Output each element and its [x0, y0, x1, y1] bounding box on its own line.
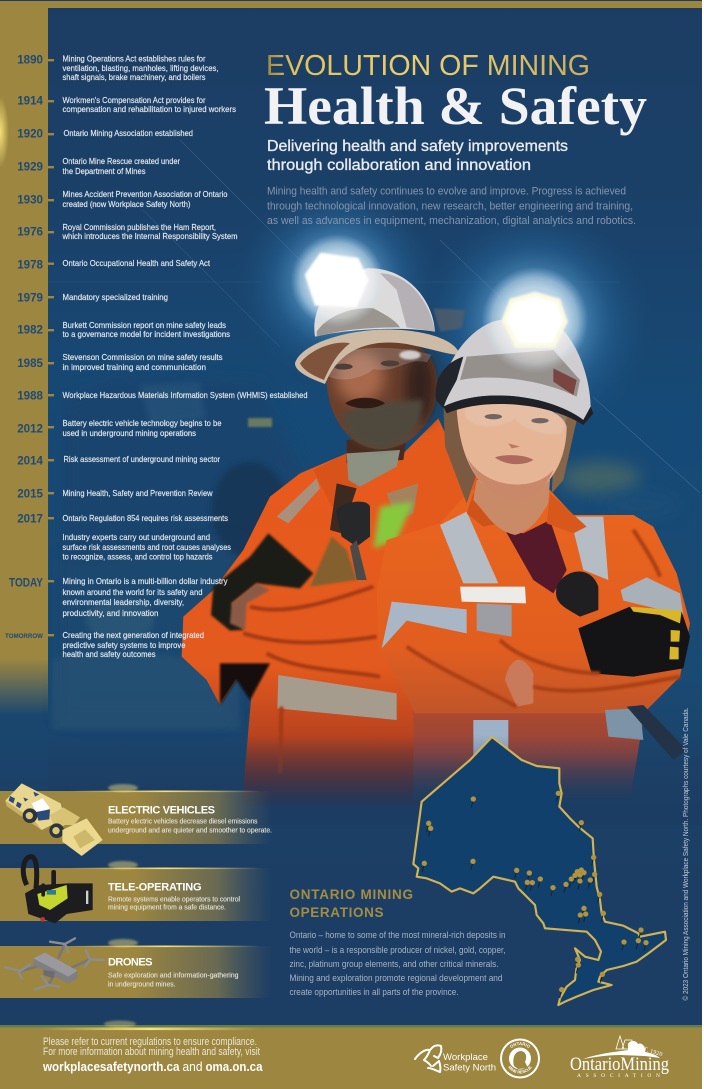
- 2017: surface risk assessments and root causes analyses: [62, 543, 231, 552]
- logo: Workplace Safety North: Safety North: [443, 1062, 496, 1074]
- Tomorrow: health and safety outcomes: [62, 650, 156, 659]
- logo: Workplace Safety North: Workplace: [443, 1052, 488, 1063]
- fade below the miners: [48, 735, 702, 825]
- logo: Ontario Mine Rescue: ONTARIO: [510, 1042, 530, 1048]
- text: Ontario mining operations: [290, 930, 506, 997]
- heading and description: TELE-OPERATING: [108, 882, 202, 894]
- Today: [9, 576, 228, 618]
- overline: Evolution of Mining: EVOLUTION OF MINING: [266, 50, 590, 82]
- Today: productivity, and innovation: [62, 609, 159, 618]
- footer note: [43, 1036, 260, 1058]
- footer links: workplacesafetynorth.ca: [42, 1060, 180, 1074]
- intro paragraph: as well as advances in equipment, mechanization, digital analytics and robotics.: [267, 215, 636, 227]
- 1988: [17, 390, 308, 402]
- title: [264, 50, 647, 136]
- heading and description: DRONES: [108, 956, 152, 968]
- woman's face: [457, 400, 567, 499]
- 1976: 1976: [17, 226, 44, 238]
- 1920: Ontario Mining Association established: [64, 129, 193, 138]
- footer links: and: [182, 1060, 202, 1074]
- 2017: Ontario Regulation 854 requires risk assessments: [62, 514, 228, 523]
- panel: drones: [0, 938, 272, 998]
- 1890: ventilation, blasting, manholes, lifting devices,: [62, 64, 218, 73]
- 1979: [17, 292, 168, 304]
- logo: Workplace Safety North: [415, 1045, 496, 1074]
- 1890: Mining Operations Act establishes rules for: [62, 54, 206, 64]
- intro paragraph: [267, 186, 636, 227]
- subtitle: [267, 138, 568, 174]
- 1979: 1979: [17, 292, 44, 304]
- 1978: Ontario Occupational Health and Safety Act: [62, 259, 211, 268]
- 1985: 1985: [17, 357, 44, 370]
- 1930: created (now Workplace Safety North): [62, 200, 191, 209]
- panel: electric vehicles: [0, 783, 272, 856]
- 2017: [17, 512, 231, 562]
- 1976: [17, 223, 238, 241]
- 1979: Mandatory specialized training: [62, 293, 168, 302]
- Tomorrow: Creating the next generation of integrated: [62, 631, 204, 640]
- heading and description: ELECTRIC VEHICLES: [108, 804, 215, 816]
- 2014: [17, 454, 220, 468]
- 1985: Stevenson Commission on mine safety results: [62, 353, 222, 362]
- lamp glow: [233, 177, 655, 442]
- photo credit: © 2023 Ontario Mining Association and Workplace Safety North. Photographs courtesy of Vale Canada.: [681, 708, 690, 1000]
- 1930: Mines Accident Prevention Association of Ontario: [62, 190, 228, 199]
- 1929: Ontario Mine Rescue created under: [62, 157, 180, 166]
- 2017: 2017: [17, 512, 43, 526]
- 2012: 2012: [17, 422, 43, 436]
- heading and description: underground and are quieter and smoother to operate.: [108, 826, 272, 834]
- footer: [0, 1019, 702, 1089]
- 2017: to recognize, assess, and control top hazards: [62, 552, 212, 562]
- man's head lamp: [291, 234, 384, 327]
- logo: Ontario Mining Association: OntarioMining: [570, 1054, 669, 1075]
- subtitle: through collaboration and innovation: [267, 157, 531, 174]
- 2015: 2015: [17, 488, 44, 500]
- 2014: Risk assessment of underground mining sector: [64, 455, 220, 464]
- Today: environmental leadership, diversity,: [62, 598, 184, 607]
- 1982: 1982: [17, 324, 43, 336]
- Today: Mining in Ontario is a multi-billion dollar industry: [62, 577, 228, 586]
- woman's head lamp: [482, 267, 588, 373]
- text: Ontario mining operations: Mining and exploration promote regional development and: [290, 973, 502, 983]
- 1890: 1890: [17, 54, 43, 66]
- Tomorrow: TOMORROW: [5, 633, 44, 640]
- logo: Ontario Mine Rescue: MINE RESCUE: [508, 1066, 532, 1074]
- 1929: [17, 157, 180, 176]
- text: Ontario mining operations: Ontario – home to some of the most mineral-rich deposits in: [290, 930, 506, 940]
- Tomorrow: predictive safety systems to improve: [62, 641, 186, 650]
- 2015: [17, 488, 213, 500]
- 1978: 1978: [17, 258, 44, 272]
- icon: electric loader: [5, 783, 103, 856]
- 2012: Battery electric vehicle technology begins to be: [62, 419, 222, 428]
- 1914: Workmen's Compensation Act provides for: [62, 96, 206, 105]
- logo: Ontario Mining Association: ASSOCIATION: [577, 1073, 660, 1079]
- province outline: [413, 737, 666, 1005]
- heading and description: Battery electric vehicles decrease diesel emissions: [108, 816, 258, 826]
- heading: Ontario mining operations: OPERATIONS: [290, 905, 384, 920]
- 1988: Workplace Hazardous Materials Information System (WHMIS) established: [62, 391, 308, 400]
- Today: TODAY: [9, 576, 43, 590]
- 1982: Burkett Commission report on mine safety leads: [62, 321, 226, 330]
- heading and description: [108, 956, 238, 988]
- 2012: [17, 419, 222, 438]
- miner on the right: [377, 320, 690, 800]
- heading and description: [108, 882, 240, 912]
- right edge strip: [702, 0, 704, 1089]
- text: Ontario mining operations: create opportunities in all parts of the province.: [290, 987, 458, 997]
- 1988: 1988: [17, 390, 44, 402]
- 1914: compensation and rehabilitation to injured workers: [62, 105, 236, 114]
- Today: known around the world for its safety and: [62, 588, 203, 597]
- icon: quadcopter drone: [5, 938, 104, 989]
- 1929: 1929: [17, 160, 44, 174]
- timeline: [5, 54, 308, 659]
- gold sidebar timeline bar: [0, 8, 48, 715]
- footer links: [42, 1060, 263, 1074]
- footer links: oma.on.ca: [206, 1060, 263, 1074]
- footer note: Please refer to current regulations to ensure compliance.: [43, 1036, 257, 1048]
- logo: Ontario Mining Association: [570, 1036, 669, 1079]
- footer note: For more information about mining health and safety, visit: [43, 1046, 260, 1058]
- man's hard hat: [295, 268, 465, 384]
- logo: Ontario Mine Rescue: [500, 1038, 540, 1078]
- text: Ontario mining operations: zinc, platinum group elements, and other critical minerals.: [290, 959, 498, 969]
- heading and description: in underground mines.: [108, 980, 176, 988]
- logo: Ontario Mining Association: EST. 1920: [635, 1044, 663, 1058]
- man's face: [321, 335, 437, 449]
- 1976: Royal Commission publishes the Ham Report,: [62, 223, 216, 232]
- 1920: 1920: [17, 128, 43, 140]
- 1890: [17, 54, 218, 82]
- map of Ontario with mine pins: [413, 737, 666, 1005]
- background photo: underground mining truck: [48, 140, 700, 730]
- 1982: [17, 321, 230, 339]
- 2014: 2014: [17, 454, 44, 468]
- photo: two miners in orange coveralls and hard hats: [182, 234, 690, 807]
- headline: Health & Safety: Health & Safety: [264, 76, 647, 136]
- miner on the left: [182, 268, 493, 807]
- heading and description: [108, 804, 272, 834]
- top gold bar: [0, 1, 704, 8]
- heading and description: mining equipment from a safe distance.: [108, 902, 226, 912]
- 1985: in improved training and communication: [62, 363, 206, 372]
- 2012: used in underground mining operations: [62, 429, 196, 438]
- heading and description: Safe exploration and information-gathering: [108, 970, 238, 980]
- 1890: shaft signals, brake machinery, and boilers: [62, 73, 206, 82]
- 1920: [17, 128, 193, 140]
- 1985: [17, 353, 222, 372]
- 1976: which introduces the Internal Responsibility System: [62, 232, 238, 241]
- 1978: [17, 258, 211, 272]
- heading and description: Remote systems enable operators to control: [108, 894, 240, 904]
- panel: tele-operating: [0, 857, 272, 923]
- 1930: 1930: [17, 194, 43, 206]
- 1930: [17, 190, 228, 209]
- mine site pins: [422, 791, 649, 998]
- 2017: Industry experts carry out underground and: [62, 533, 210, 542]
- heading: Ontario mining operations: [290, 887, 413, 920]
- woman's hard hat: [436, 320, 593, 425]
- text: Ontario mining operations: the world – is a responsible producer of nickel, gold, copper,: [290, 945, 506, 955]
- intro paragraph: Mining health and safety continues to evolve and improve. Progress is achieved: [267, 186, 626, 198]
- 1929: the Department of Mines: [62, 167, 146, 176]
- icon: remote control console: [23, 857, 93, 923]
- 1914: [17, 94, 236, 114]
- Tomorrow: [5, 631, 204, 659]
- 1914: 1914: [17, 94, 44, 108]
- heading: Ontario mining operations: ONTARIO MINING: [290, 887, 413, 902]
- 2015: Mining Health, Safety and Prevention Review: [62, 489, 213, 498]
- subtitle: Delivering health and safety improvements: [267, 138, 568, 155]
- intro paragraph: through technological innovation, new research, better engineering and training,: [267, 200, 633, 212]
- 1982: to a governance model for incident investigations: [62, 330, 230, 339]
